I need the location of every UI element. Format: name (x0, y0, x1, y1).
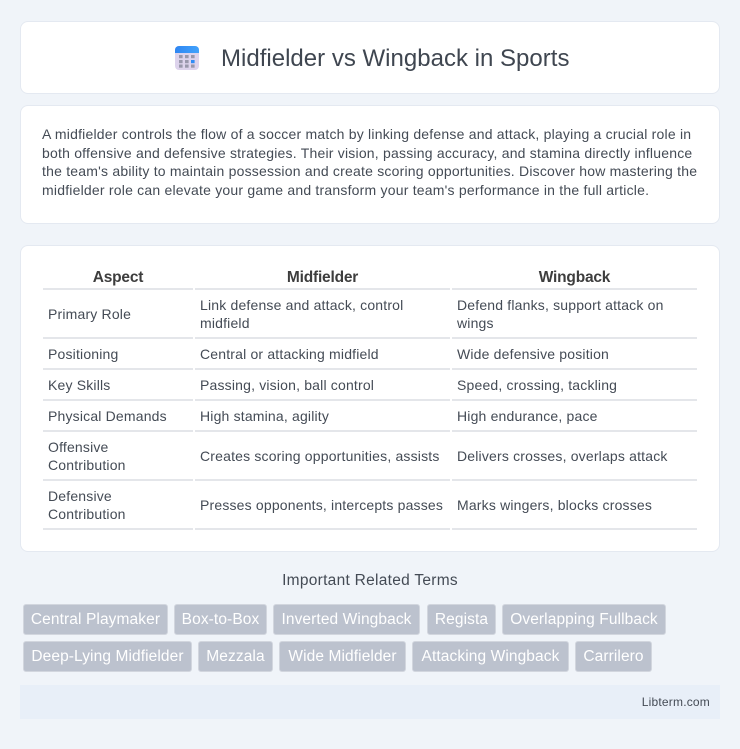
row: primary role: Link defense and attack, control (200, 297, 403, 313)
tag list: related terms (23, 604, 666, 672)
row: physical demands: High endurance, pace (457, 408, 598, 424)
tag list: related terms: Deep-Lying Midfielder (31, 648, 184, 665)
icon: calendar (175, 46, 199, 70)
panel: comparison table (20, 245, 720, 552)
text block: introduction (42, 126, 697, 198)
row: defensive contribution: Contribution (48, 506, 126, 522)
title: Midfielder vs Wingback in Sports (221, 45, 569, 72)
tag list: related terms: Mezzala (206, 648, 265, 665)
text block: introduction: the team's ability to maintain possession and create scoring opportunities. Discover how mastering the (42, 163, 697, 179)
row: key skills (43, 377, 697, 401)
row: positioning: Positioning (48, 346, 118, 362)
text block: introduction: A midfielder controls the flow of a soccer match by linking defense and attack, playing a crucial role in (42, 126, 691, 142)
row: primary role: Primary Role (48, 306, 131, 322)
row: primary role: wings (457, 315, 494, 331)
row: physical demands (43, 408, 697, 432)
row: physical demands: Physical Demands (48, 408, 167, 424)
panel: introduction (20, 105, 720, 224)
tag list: related terms: Inverted Wingback (281, 611, 412, 628)
row: primary role: midfield (200, 315, 250, 331)
row: offensive contribution: Offensive (48, 439, 109, 455)
row: key skills: Passing, vision, ball control (200, 377, 374, 393)
row: primary role (43, 297, 697, 339)
tag list: related terms: Box-to-Box (182, 611, 259, 628)
tag list: related terms: Central Playmaker (31, 611, 160, 628)
row: positioning: Central or attacking midfield (200, 346, 379, 362)
row: positioning: Wide defensive position (457, 346, 609, 362)
row: key skills: Speed, crossing, tackling (457, 377, 617, 393)
row: offensive contribution: Delivers crosses, overlaps attack (457, 448, 668, 464)
row: defensive contribution: Presses opponents, intercepts passes (200, 497, 443, 513)
row: offensive contribution (43, 439, 697, 481)
row: offensive contribution: Contribution (48, 457, 126, 473)
row: defensive contribution: Defensive (48, 488, 112, 504)
row: offensive contribution: Creates scoring opportunities, assists (200, 448, 440, 464)
row: physical demands: High stamina, agility (200, 408, 329, 424)
table header: Aspect (93, 269, 143, 286)
footer text: Libterm.com (642, 695, 710, 709)
text block: introduction: midfielder role can elevate your game and transform your team's performance in the full article. (42, 182, 649, 198)
tag list: related terms: Carrilero (583, 648, 644, 665)
row: positioning (43, 346, 697, 370)
row: defensive contribution: Marks wingers, blocks crosses (457, 497, 652, 513)
text block: introduction: both offensive and defensive strategies. Their vision, passing accuracy, and stamina directly influence (42, 145, 692, 161)
tag list: related terms: Regista (435, 611, 488, 628)
table header (43, 269, 697, 290)
row: primary role: Defend flanks, support attack on (457, 297, 664, 313)
table header: Midfielder (287, 269, 358, 286)
tag list: related terms: Wide Midfielder (288, 648, 397, 665)
footer (20, 685, 720, 719)
row: defensive contribution (43, 488, 697, 530)
heading: important related terms: Important Related Terms (282, 572, 458, 589)
tag list: related terms: Overlapping Fullback (510, 611, 658, 628)
row: key skills: Key Skills (48, 377, 110, 393)
panel: header (20, 21, 720, 94)
table header: Wingback (539, 269, 610, 286)
tag list: related terms: Attacking Wingback (422, 648, 559, 665)
